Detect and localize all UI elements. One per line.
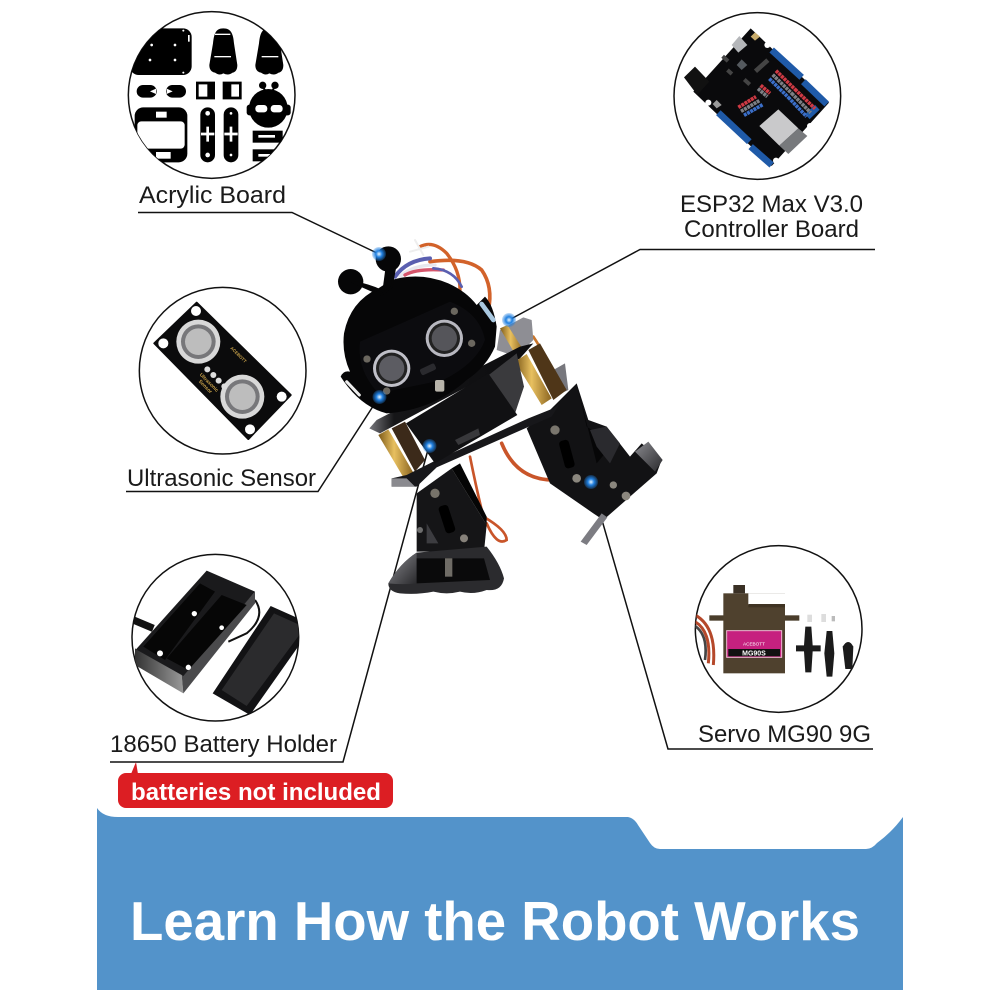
component: ultrasonic sensor: ACEBOTT <box>229 346 248 364</box>
pin rows <box>738 71 815 117</box>
left leg <box>417 463 487 552</box>
component: acrylic board <box>128 12 295 178</box>
callout: batteries not included: batteries not included <box>131 779 381 806</box>
servo horns and screws <box>796 614 853 677</box>
wifi module <box>759 109 798 146</box>
wires <box>395 240 560 541</box>
label: controller board: Controller Board <box>684 216 859 243</box>
leader lines <box>110 212 875 762</box>
face plate <box>360 302 485 393</box>
callout: batteries not included <box>118 762 393 808</box>
banner title: Learn How the Robot Works <box>130 890 860 952</box>
right leg and foot <box>527 383 663 545</box>
rear gold standoffs <box>378 325 567 478</box>
component: battery holder <box>132 554 313 721</box>
component: servo <box>695 546 862 712</box>
marker dots <box>372 247 598 489</box>
blue headers <box>718 50 827 165</box>
component: ultrasonic sensor: Ultrasonic <box>198 372 220 394</box>
label: ultrasonic sensor: Ultrasonic Sensor <box>127 465 316 492</box>
white holes and switches <box>705 42 813 164</box>
left eye sensor <box>373 350 410 387</box>
component: controller board <box>674 13 841 179</box>
robot face part <box>249 89 288 128</box>
label: battery holder: 18650 Battery Holder <box>110 731 337 758</box>
component: servo: ACEBOTT <box>743 641 765 646</box>
right rear plate <box>497 317 533 357</box>
antennae <box>376 246 401 272</box>
component: servo: MG90S <box>742 650 766 657</box>
plates and body box <box>369 343 560 487</box>
component: ultrasonic sensor: Sensor <box>197 379 213 395</box>
component: ultrasonic sensor <box>139 287 306 454</box>
label: acrylic board: Acrylic Board <box>139 182 286 209</box>
blue banner <box>97 808 903 990</box>
label: servo: Servo MG90 9G <box>698 721 871 748</box>
head <box>338 246 497 413</box>
right eye sensor <box>426 320 463 357</box>
label: controller board <box>680 191 863 243</box>
left foot <box>388 547 504 594</box>
robot photo <box>338 240 663 594</box>
label: controller board: ESP32 Max V3.0 <box>680 191 863 218</box>
